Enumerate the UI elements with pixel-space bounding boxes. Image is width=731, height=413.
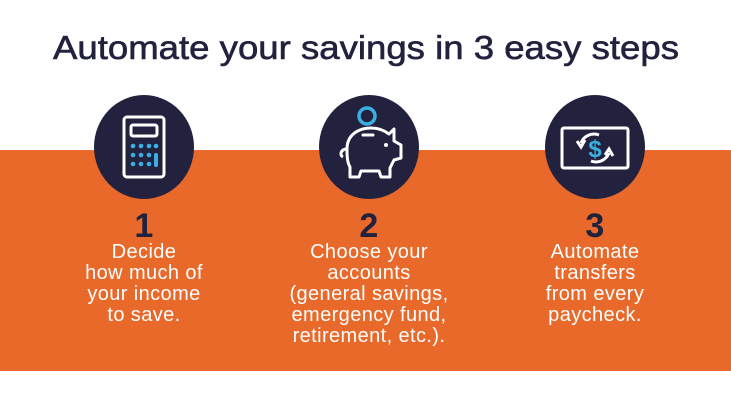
title: Automate your savings in 3 easy steps — [53, 29, 679, 66]
orange band — [0, 150, 731, 371]
step 3 — [546, 207, 644, 326]
step 3: paycheck. — [548, 304, 642, 326]
step 1: 1 — [134, 207, 154, 245]
step 2: Choose your — [310, 241, 428, 263]
step 3: Automate — [551, 241, 639, 263]
step 3: 3 — [585, 207, 605, 245]
icon: money transfer: $ — [588, 136, 602, 163]
icon: money transfer — [545, 95, 645, 199]
step 3: from every — [546, 283, 644, 305]
step 2: retirement, etc.). — [293, 325, 445, 347]
step 2: (general savings, — [289, 283, 449, 305]
step 3: transfers — [554, 262, 636, 284]
step 1: to save. — [107, 304, 181, 326]
icon: piggy bank — [319, 95, 419, 199]
step 2: accounts — [327, 262, 411, 284]
step 1: how much of — [85, 262, 203, 284]
icon: calculator — [94, 95, 194, 199]
step 1 — [85, 207, 203, 326]
step 2 — [289, 207, 449, 347]
step 1: Decide — [112, 241, 176, 263]
step 1: your income — [87, 283, 201, 305]
step 2: 2 — [359, 207, 379, 245]
step 2: emergency fund, — [292, 304, 446, 326]
